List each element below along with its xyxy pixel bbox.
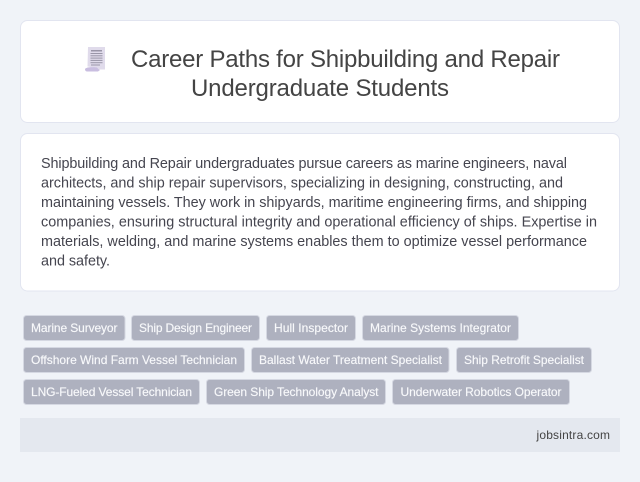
- tag: Green Ship Technology Analyst: [206, 380, 386, 404]
- tag: Marine Systems Integrator: Marine Systems Integrator: [370, 321, 511, 335]
- text block: description: architects, and ship repair supervisors, specializing in designing, constructing, and: [41, 175, 563, 191]
- tag: Marine Surveyor: Marine Surveyor: [31, 321, 118, 335]
- tag: Hull Inspector: Hull Inspector: [274, 321, 348, 335]
- tag: Marine Surveyor: [24, 316, 125, 340]
- title: [131, 46, 560, 102]
- footer source text: jobsintra.com: [536, 428, 610, 442]
- tag: LNG-Fueled Vessel Technician: LNG-Fueled Vessel Technician: [31, 385, 192, 399]
- tag: Ship Retrofit Specialist: [456, 348, 592, 372]
- panel: career tags: [24, 316, 592, 404]
- tag: Green Ship Technology Analyst: Green Ship Technology Analyst: [214, 385, 379, 399]
- tag: Ship Design Engineer: Ship Design Engineer: [139, 321, 252, 335]
- text block: description: [41, 156, 597, 269]
- text block: description: Shipbuilding and Repair undergraduates pursue careers as marine engineers, naval: [41, 156, 567, 172]
- text block: description: and safety.: [41, 253, 110, 269]
- tag: Ballast Water Treatment Specialist: [252, 348, 449, 372]
- text block: description: maintaining vessels. They work in shipyards, maritime engineering firms, and shipping: [41, 195, 587, 211]
- tag: LNG-Fueled Vessel Technician: [24, 380, 200, 404]
- text block: description: companies, ensuring structural integrity and operational efficiency of ships. Expertise in: [41, 214, 597, 230]
- tag: Ballast Water Treatment Specialist: Ballast Water Treatment Specialist: [259, 353, 443, 367]
- tag: Marine Systems Integrator: [362, 316, 518, 340]
- title: Undergraduate Students: [191, 75, 449, 102]
- panel: description: [20, 134, 620, 291]
- tag: Underwater Robotics Operator: [392, 380, 570, 404]
- tag: Offshore Wind Farm Vessel Technician: Offshore Wind Farm Vessel Technician: [31, 353, 237, 367]
- footer bar: [20, 418, 620, 452]
- tag: Offshore Wind Farm Vessel Technician: [24, 348, 244, 372]
- tag: Hull Inspector: [266, 316, 356, 340]
- text block: description: materials, welding, and marine systems enables them to optimize vessel performance: [41, 234, 587, 250]
- tag: Ship Retrofit Specialist: Ship Retrofit Specialist: [464, 353, 585, 367]
- title: Career Paths for Shipbuilding and Repair: [131, 46, 560, 73]
- icon: paper scroll: [85, 47, 105, 72]
- tag: Ship Design Engineer: [132, 316, 260, 340]
- tag: Underwater Robotics Operator: Underwater Robotics Operator: [400, 385, 562, 399]
- panel: title header: [20, 20, 620, 122]
